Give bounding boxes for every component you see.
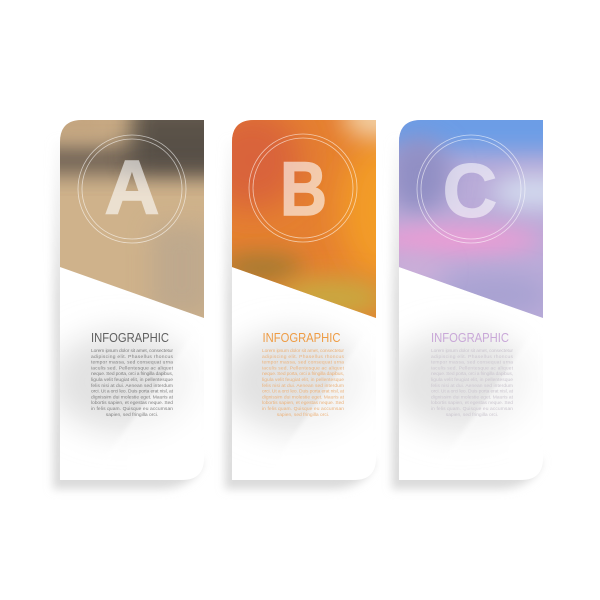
card C body text: orci. Ut a orci leo. Duis porta erat nisl, at (431, 389, 514, 395)
card A body text: ligula velit feugiat elit, in pellentesque (91, 377, 173, 383)
card C body text: iaculis sed. Pellentesque ac aliquet (431, 365, 514, 371)
card B body text: adipiscing elit. Phasellus rhoncus (262, 354, 345, 360)
card B body text: dignissim dui molestie eget. Mauris at (262, 394, 345, 400)
card A body text: iaculis sed. Pellentesque ac aliquet (91, 365, 174, 371)
card A body text: dignissim dui molestie eget. Mauris at (91, 394, 174, 400)
card C body text: ligula velit feugiat elit, in pellentesque (431, 377, 513, 383)
card B heading: INFOGRAPHIC (262, 331, 340, 345)
card B body text: sapien, sed fringilla orci. (277, 412, 329, 418)
card C photo panel (399, 120, 543, 318)
card A body text: tempor massa, sed consequat urna (91, 360, 173, 366)
card B white sheet (232, 267, 376, 480)
card A body text: sapien, sed fringilla orci. (106, 412, 158, 418)
card C badge: C (443, 149, 497, 234)
card C heading: INFOGRAPHIC (431, 331, 509, 345)
card B (222, 120, 376, 492)
card C body text (431, 348, 514, 418)
card A body text (91, 348, 174, 418)
card A body text: neque. Sed porta, orci a fringilla dapibus, (91, 371, 173, 377)
card C body text: felis nisi at dui. Aenean sed interdum (431, 383, 513, 389)
card C white sheet (399, 267, 542, 480)
card A white sheet (60, 267, 204, 480)
card B body text: in felis quam. Quisque eu accumsan (262, 406, 344, 412)
card C body text: tempor massa, sed consequat urna (431, 360, 513, 366)
card B photo panel (232, 120, 376, 318)
card B body text: lobortis sapien, et egestas neque. Sed (262, 400, 344, 406)
card A (50, 120, 204, 492)
card C body text: sapien, sed fringilla orci. (446, 412, 498, 418)
card B body text: Lorem ipsum dolor sit amet, consectetur (262, 348, 344, 354)
card B body text: orci. Ut a orci leo. Duis porta erat nisl, at (262, 389, 345, 395)
card B body text: neque. Sed porta, orci a fringilla dapibus, (262, 371, 344, 377)
card B body text: tempor massa, sed consequat urna (262, 360, 344, 366)
card A body text: orci. Ut a orci leo. Duis porta erat nisl, at (91, 389, 174, 395)
infographic: three option cards (50, 120, 543, 492)
card C shadow (392, 140, 542, 489)
card C body text: neque. Sed porta, orci a fringilla dapibus, (431, 371, 513, 377)
card A body text: felis nisi at dui. Aenean sed interdum (91, 383, 173, 389)
card A body text: in felis quam. Quisque eu accumsan (91, 406, 173, 412)
card A body text: Lorem ipsum dolor sit amet, consectetur (91, 348, 173, 354)
card C (388, 120, 543, 492)
card C body text: Lorem ipsum dolor sit amet, consectetur (431, 348, 513, 354)
card B body text: iaculis sed. Pellentesque ac aliquet (262, 365, 345, 371)
card B badge: B (280, 147, 327, 232)
card A shadow (53, 140, 203, 489)
card A body text: adipiscing elit. Phasellus rhoncus (91, 354, 174, 360)
card C badge (417, 135, 525, 243)
card A badge: A (105, 146, 159, 230)
card B body text: ligula velit feugiat elit, in pellentesque (262, 377, 344, 383)
card B badge (249, 134, 357, 242)
card B body text: felis nisi at dui. Aenean sed interdum (262, 383, 344, 389)
card A photo panel (60, 120, 204, 318)
card C body text: lobortis sapien, et egestas neque. Sed (431, 400, 513, 406)
card A body text: lobortis sapien, et egestas neque. Sed (91, 400, 173, 406)
card C body text: adipiscing elit. Phasellus rhoncus (431, 354, 514, 360)
card C body text: in felis quam. Quisque eu accumsan (431, 406, 513, 412)
card C body text: dignissim dui molestie eget. Mauris at (431, 394, 514, 400)
card B shadow (225, 140, 375, 489)
card A badge (78, 135, 186, 243)
card B body text (262, 348, 345, 418)
card A heading: INFOGRAPHIC (91, 331, 169, 345)
